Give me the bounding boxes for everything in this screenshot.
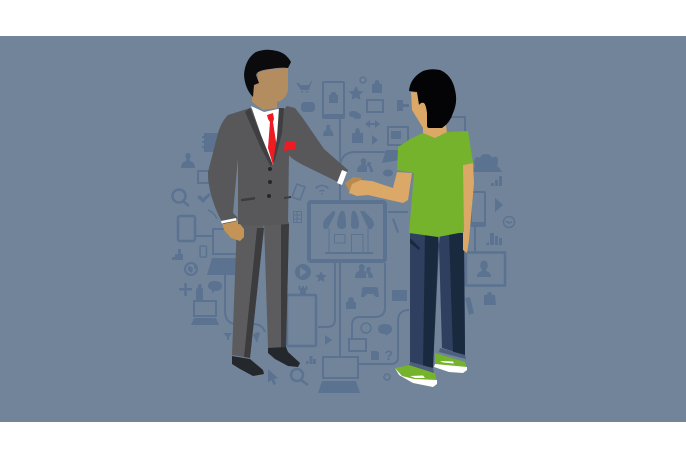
icon: bag lower right: [484, 292, 496, 305]
icon: bubble: [383, 170, 393, 176]
icon: monitor small: [367, 100, 383, 112]
icon: chat bubbles: [349, 111, 361, 119]
icon: star small: [315, 271, 327, 282]
icon: magnifier: [172, 190, 189, 206]
icon: camera: [301, 102, 315, 112]
icon: megaphone: [223, 333, 232, 340]
icon: check: [197, 193, 211, 203]
icon: gear top: [360, 77, 366, 83]
lapels: [245, 108, 284, 167]
icon: wifi small: [208, 210, 217, 219]
icon: phone tilted: [292, 184, 305, 200]
icon: laptop left: [207, 229, 237, 275]
icon: envelope: [392, 290, 407, 301]
icon: wifi: [315, 185, 329, 195]
icon network: marketing icons behind figures: [172, 77, 514, 393]
icon: question mark: ?: [384, 347, 393, 363]
icon: chat: [208, 281, 222, 294]
icon: presenter: [196, 284, 203, 300]
icon: tablet left: [178, 216, 195, 241]
left shoe: [395, 365, 437, 387]
near arm and hand: [349, 172, 412, 203]
icon: clock face: [504, 216, 514, 228]
icon: bag top: [372, 80, 382, 93]
shirt: [251, 106, 281, 165]
icon: user frame: [466, 252, 505, 286]
trouser legs: [232, 222, 289, 358]
icon: bars bottom: [306, 356, 316, 364]
hair: [244, 50, 291, 97]
icon: globe: [185, 263, 197, 275]
jacket: [208, 106, 348, 226]
cuffs: [221, 170, 347, 224]
icon: bag middle: [352, 128, 363, 143]
trouser cuffs: [409, 348, 466, 373]
neck and face: [411, 92, 447, 139]
icon: plus: [179, 283, 192, 296]
icon: central shop screen: [309, 202, 385, 261]
buttons: [268, 167, 272, 171]
icon: person left: [181, 153, 195, 168]
icon: people group right: [473, 154, 502, 172]
icon: star: [349, 86, 363, 100]
pocket: [410, 238, 420, 250]
pocket square: [284, 141, 296, 151]
icon: left badge: [202, 133, 222, 152]
icon: bars right: [486, 233, 502, 245]
icon: cart: [296, 81, 312, 92]
hair: [409, 69, 456, 128]
icon: play arrow: [372, 135, 378, 145]
face and neck: [252, 68, 288, 110]
icon: magnifier lower: [291, 369, 308, 385]
icon: cursor: [268, 369, 278, 385]
icon: phone small: [200, 246, 206, 257]
trouser legs: [410, 233, 465, 368]
icon: arrow right: [495, 198, 503, 212]
pocket flaps: [241, 196, 291, 202]
figure: customer in green shirt: [345, 69, 474, 387]
far arm: [463, 163, 474, 253]
connector lines: [196, 117, 475, 364]
icon: tag: [397, 100, 409, 111]
shirt: [397, 131, 473, 237]
right shoe: [435, 353, 467, 373]
icon: phone right: [471, 192, 485, 227]
icon: laptop mail: [382, 127, 408, 163]
icon: person top: [323, 125, 334, 136]
icon: speech bubble: [378, 324, 392, 336]
icon: bag centre: [346, 297, 356, 309]
icon: arrow small: [325, 335, 332, 345]
gap between arm and body: [233, 158, 238, 218]
businessman hand: [345, 177, 361, 196]
icon: tablet centre lower: [287, 286, 316, 346]
icon: bars upper right: [491, 176, 502, 186]
icon: laptop bottom: [318, 357, 360, 393]
icon: file: [371, 351, 379, 360]
left hand: [222, 219, 244, 241]
tie: [267, 113, 277, 165]
icon: arrows: [365, 120, 380, 128]
icon: document: [294, 212, 302, 222]
icon: pen: [392, 218, 399, 233]
icon: people lower: [355, 264, 373, 278]
icon: tablet top with lock: [323, 82, 344, 119]
figure: businessman: [208, 50, 348, 376]
icon: gamepad: [361, 287, 379, 297]
icon: tilted bag right: [465, 297, 474, 315]
icon: monitor left: [198, 171, 209, 183]
shoes: [232, 356, 264, 376]
icon: gear: [384, 374, 390, 380]
icon: laptop lower left: [191, 301, 219, 325]
icon: people: [357, 158, 373, 172]
icon: play circle: [295, 264, 311, 280]
icon: clock: [361, 323, 371, 333]
icon: box: [349, 339, 366, 351]
icon: pin: [253, 332, 260, 343]
icon: bars left: [172, 249, 183, 260]
